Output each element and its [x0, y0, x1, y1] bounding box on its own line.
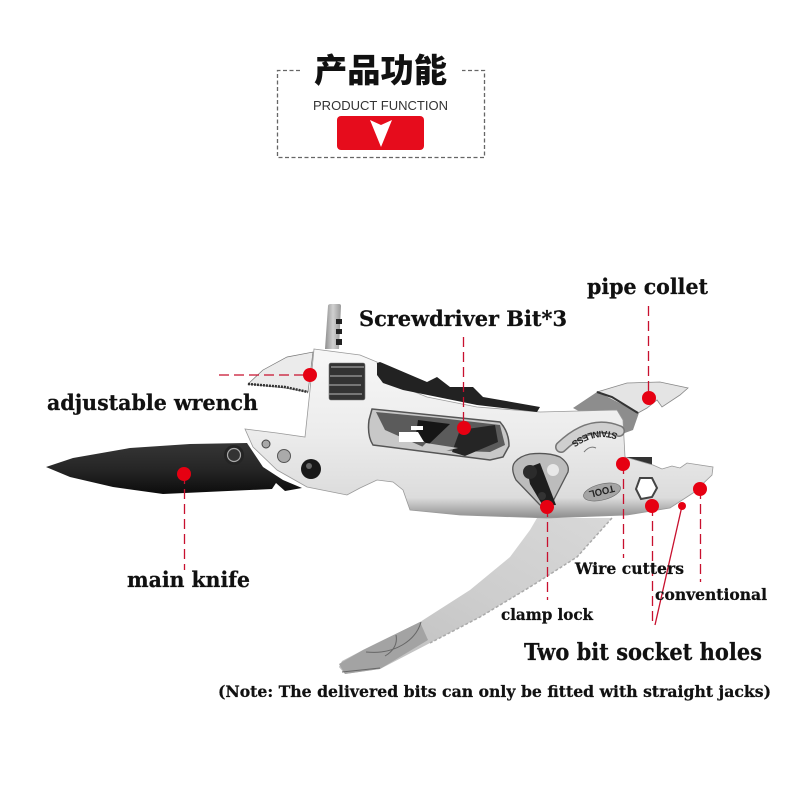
callout leader lines	[184, 306, 700, 625]
upper pliers jaw	[573, 382, 688, 434]
small pivot mark	[584, 447, 596, 452]
label: conventional: conventional	[655, 585, 767, 604]
title: 产品功能	[314, 44, 447, 92]
note: (Note: The delivered bits can only be fitted with straight jacks)	[218, 682, 771, 701]
leader: adjustable wrench	[219, 374, 310, 376]
leader: pipe collet	[648, 306, 650, 398]
main steel body	[245, 349, 713, 518]
leader: main knife	[184, 474, 186, 570]
tool stamp	[582, 480, 622, 504]
label: screwdriver bit: Screwdriver Bit*3	[359, 306, 567, 331]
hex socket	[636, 478, 657, 499]
screwdriver bit on top	[325, 304, 342, 349]
main black knife	[46, 443, 302, 494]
multi-tool illustration	[46, 304, 714, 674]
clamp lock	[513, 453, 568, 507]
leader: wire cutters	[622, 464, 624, 558]
red badge with arrow	[337, 116, 424, 150]
header: product function	[278, 44, 484, 158]
wrench thumbwheel	[329, 363, 365, 400]
knife pivot	[224, 445, 244, 465]
label: clamp lock: clamp lock	[501, 605, 594, 624]
header dashed frame	[278, 70, 484, 158]
black rubber grip	[377, 362, 540, 412]
leader: screwdriver bit	[462, 337, 464, 428]
label: adjustable wrench: adjustable wrench	[47, 390, 258, 415]
label: pipe collet: pipe collet	[587, 274, 708, 299]
label: main knife: main knife	[127, 567, 250, 592]
lower serrated blade	[339, 518, 612, 674]
leader: clamp lock	[546, 507, 548, 600]
label: two bit socket holes: Two bit socket holes	[524, 639, 762, 666]
stainless stamp	[555, 421, 625, 453]
tool storage window	[368, 409, 509, 460]
label: wire cutters: Wire cutters	[574, 559, 684, 578]
upper wrench jaw	[248, 352, 313, 392]
leader: socket hole one	[652, 506, 654, 625]
pliers slot	[625, 457, 652, 465]
stainless stamp: STAINLESS	[572, 430, 618, 446]
callout dots	[177, 368, 707, 514]
subtitle: PRODUCT FUNCTION	[313, 98, 448, 113]
leader: conventional	[700, 489, 702, 582]
leader: socket hole two	[655, 506, 682, 625]
wrench rivets	[262, 440, 321, 479]
tool stamp: TOOL	[588, 482, 616, 499]
